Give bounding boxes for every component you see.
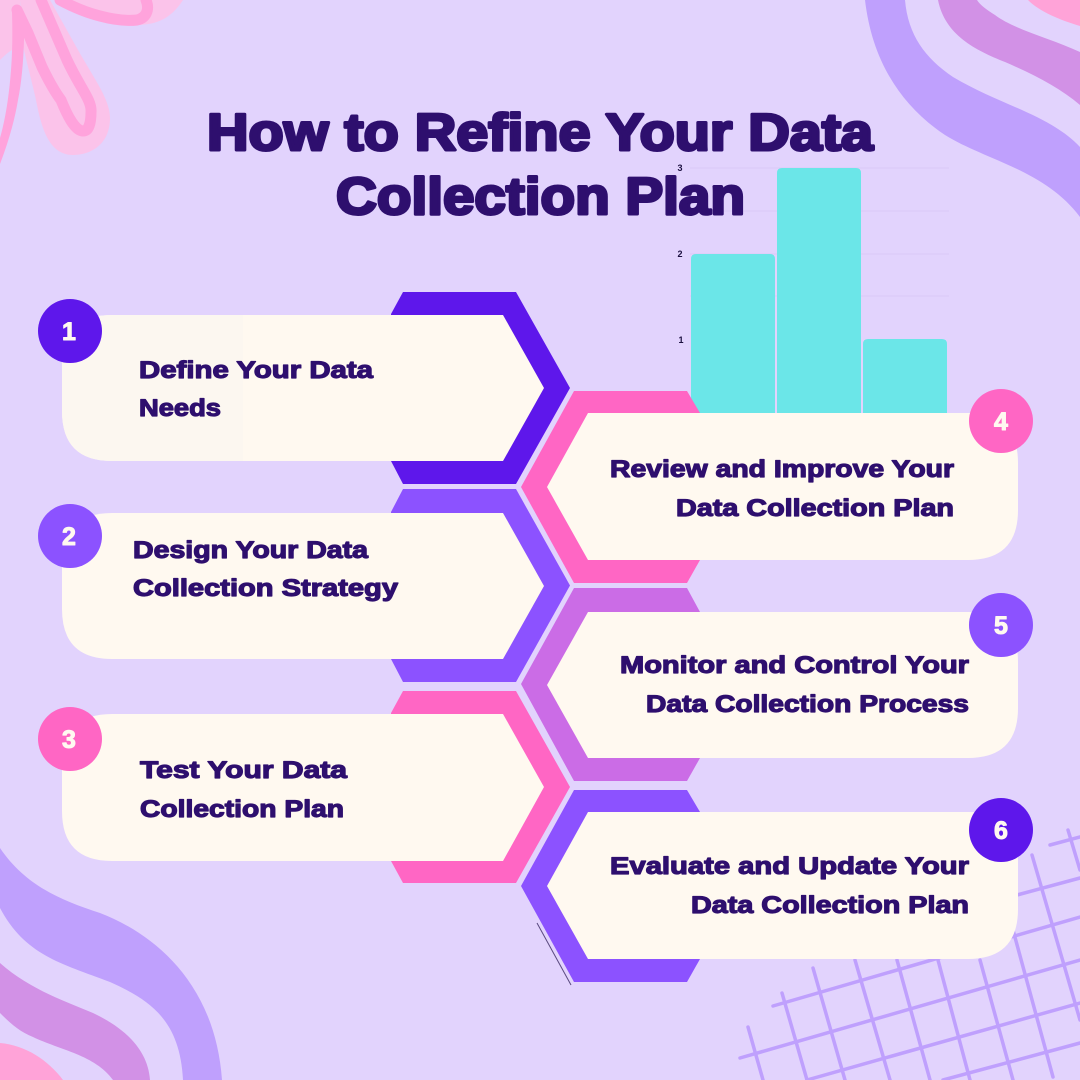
step 2	[38, 489, 570, 682]
step 4	[521, 389, 1033, 583]
text 1: Define Your Data	[139, 357, 374, 384]
card 1	[62, 315, 544, 461]
text 1: Needs	[139, 395, 221, 422]
bar chart	[677, 163, 949, 413]
text 1	[139, 357, 374, 422]
badge 5	[969, 593, 1033, 657]
decoration: grid bottom right	[740, 830, 1080, 1080]
step 3	[38, 691, 570, 883]
badge 2	[38, 504, 102, 568]
title: Collection Plan	[336, 168, 745, 226]
axis labels: 1	[678, 335, 684, 345]
badge 3	[38, 707, 102, 771]
decoration: pink flower top left	[0, 0, 183, 164]
step 1	[38, 292, 570, 484]
card 3	[62, 714, 544, 861]
text 5: Data Collection Process	[646, 691, 969, 718]
hexagon ring 2	[391, 489, 570, 682]
text 2	[133, 537, 399, 602]
text 6	[610, 853, 969, 919]
step 6	[521, 790, 1033, 985]
thin line under ring 6	[537, 923, 571, 985]
axis labels: 3	[677, 163, 683, 173]
card 6	[547, 812, 1018, 959]
text 4: Review and Improve Your	[610, 456, 954, 483]
card 5	[547, 612, 1018, 758]
step 5	[521, 588, 1033, 781]
decoration: waves bottom left	[0, 848, 222, 1080]
text 3: Collection Plan	[140, 796, 344, 823]
title: How to Refine Your Data	[207, 104, 874, 162]
bar: second	[777, 168, 861, 413]
badge 4: 4	[994, 408, 1008, 436]
badge 2: 2	[62, 523, 76, 551]
text 6: Data Collection Plan	[691, 892, 969, 919]
hexagon ring 1	[391, 292, 570, 484]
text 5: Monitor and Control Your	[620, 652, 969, 679]
text 3: Test Your Data	[140, 757, 348, 784]
text 3	[140, 757, 348, 823]
text 2: Collection Strategy	[133, 575, 399, 602]
badge 5: 5	[994, 612, 1008, 640]
badge 1	[38, 299, 102, 363]
badge 1: 1	[62, 318, 76, 346]
text 4	[610, 456, 954, 522]
decoration: waves top right	[865, 0, 1080, 217]
hexagon ring 4	[521, 391, 700, 583]
badge 6	[969, 798, 1033, 862]
hexagon ring 6	[521, 790, 700, 982]
badge 4	[969, 389, 1033, 453]
title	[207, 104, 874, 226]
text 6: Evaluate and Update Your	[610, 853, 969, 880]
bar: third	[863, 339, 947, 413]
text 2: Design Your Data	[133, 537, 369, 564]
text 4: Data Collection Plan	[676, 495, 954, 522]
card 2	[62, 513, 544, 659]
text 5	[620, 652, 969, 718]
axis labels: 2	[677, 249, 683, 259]
hexagon ring 5	[521, 588, 700, 781]
axis labels	[677, 163, 684, 345]
hexagon ring 3	[391, 691, 570, 883]
bar: first	[691, 254, 775, 413]
badge 3: 3	[62, 726, 76, 754]
card 4	[547, 413, 1018, 560]
badge 6: 6	[994, 817, 1008, 845]
